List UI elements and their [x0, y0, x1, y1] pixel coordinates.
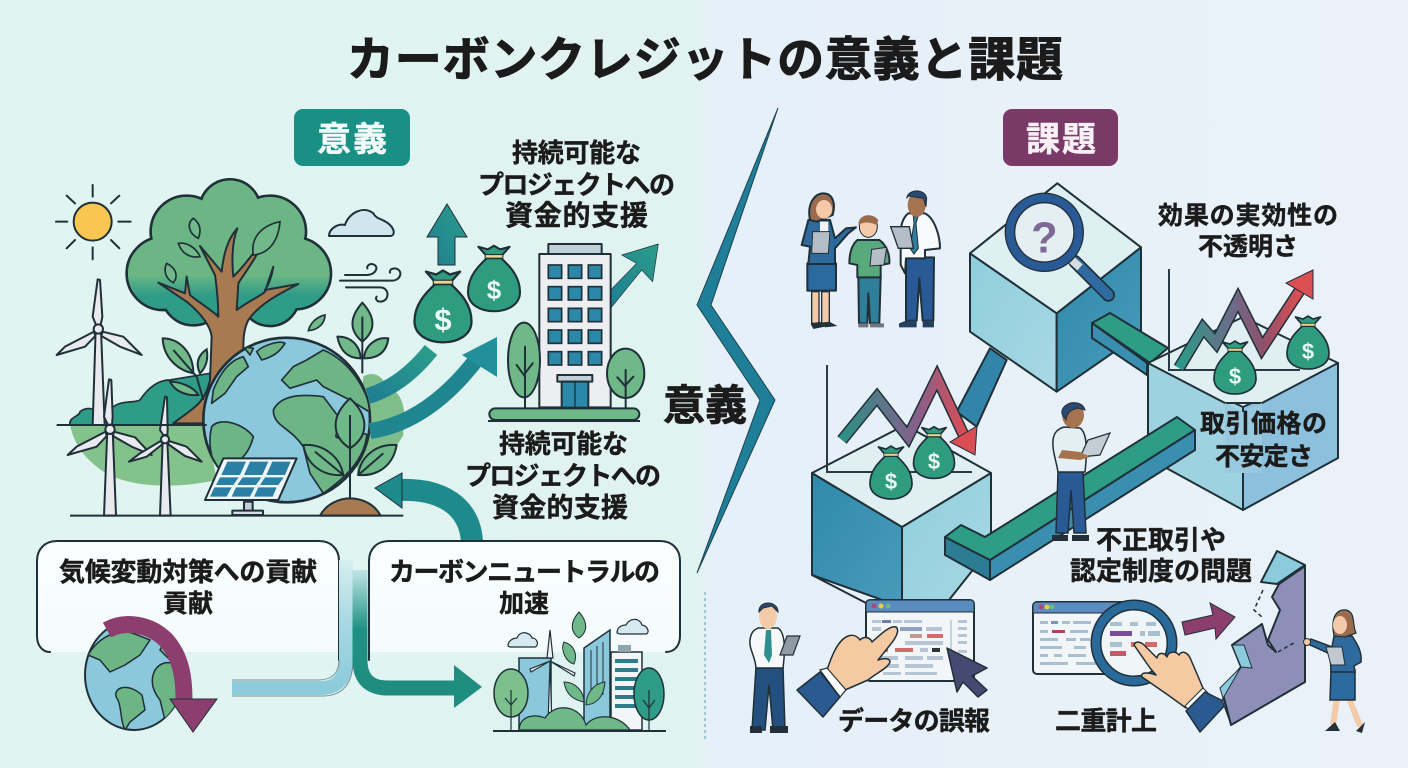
badge: challenges: [1003, 109, 1118, 166]
text: effect opacity: [1158, 202, 1338, 261]
icon: money bag: [414, 271, 472, 342]
icon: mouse cursor: [947, 648, 987, 697]
arrow: light band: [232, 560, 353, 696]
text: effect opacity: 効果の実効性の: [1158, 202, 1338, 230]
icon: cloud: [329, 210, 394, 236]
badge: significance: 意義: [317, 121, 387, 159]
arrow: plum pointing at broken block: [1182, 603, 1235, 639]
icon: magnifying glass with question mark: ?: [1031, 215, 1058, 263]
icon: money bag: [870, 446, 912, 499]
text: data error: データの誤報: [838, 706, 990, 736]
panel: climate contribution box: 貢献: [163, 590, 213, 618]
icon: solar panel: [205, 458, 297, 515]
figure: man: [891, 191, 940, 327]
icon: large wind turbine: [57, 279, 142, 425]
text: sustainable project funding (top): [478, 138, 675, 231]
panel: climate contribution box: [37, 541, 339, 660]
figure: person with clipboard: [750, 603, 800, 733]
beam: upper connector: [1092, 313, 1168, 363]
icon: tree: [127, 179, 331, 423]
panel: carbon neutral box: [369, 541, 680, 660]
text: double counting: 二重計上: [1055, 706, 1157, 736]
text: sustainable project funding (top): プロジェクトへの: [478, 170, 675, 200]
panel: carbon neutral box: カーボンニュートラルの: [389, 557, 660, 587]
text: effect opacity: 不透明さ: [1198, 233, 1298, 261]
figure: woman: [802, 193, 856, 329]
panel: carbon neutral box: 加速: [499, 590, 549, 618]
icon: pointing hand: [1134, 642, 1227, 732]
icon: sapling: [303, 398, 397, 516]
cube: magnifier block: [957, 183, 1141, 427]
icon: broken block: [1220, 551, 1305, 725]
chart: upward price line: [1169, 269, 1313, 370]
icon: magnifying glass: [1096, 605, 1172, 681]
icon: money bag: $: [1302, 339, 1314, 364]
cube: data block: [812, 425, 991, 607]
text: price instability: 取引価格の: [1200, 410, 1327, 438]
icon: globe: [203, 338, 372, 502]
text: fraud and certification: [1070, 525, 1252, 586]
panel: challenges: [750, 109, 1365, 736]
icon: magnifying glass with question mark: [1010, 198, 1108, 295]
arrow: up: [427, 204, 467, 265]
text: price instability: [1200, 410, 1327, 471]
icon: money bag: [914, 427, 954, 478]
base line under building: [488, 420, 640, 422]
illustration: nature scene with tree, turbines and globe: [56, 179, 404, 516]
icon: sun: [56, 185, 131, 259]
icon: ground: [70, 425, 217, 486]
icon: small plant: [337, 303, 388, 373]
window: double counting with magnifier: [1033, 602, 1227, 732]
figure: woman presenting: [1304, 610, 1365, 733]
icon: green city: [493, 612, 666, 731]
icon: money bag: $: [487, 275, 502, 305]
arrow: curved flow toward building: [370, 337, 497, 431]
icon: leaves at trunk: [163, 338, 207, 400]
icon: money bag: $: [928, 449, 940, 474]
text: fraud and certification: 不正取引や: [1096, 525, 1226, 555]
chart: downward price line: [827, 365, 977, 472]
icon: turbines front: [68, 379, 202, 516]
text: sustainable project funding (middle): [465, 429, 661, 523]
text: sustainable project funding (middle): 持続可能な: [499, 429, 628, 459]
figure: person with laptop: [1052, 402, 1110, 541]
icon: money bag: [1214, 341, 1256, 394]
panel: climate contribution box: 気候変動対策への貢献: [59, 557, 317, 587]
group of people: [802, 191, 940, 329]
text: price instability: 不安定さ: [1215, 443, 1313, 471]
beam: checkmark connector: [945, 417, 1195, 580]
text: sustainable project funding (middle): 資金的支援: [492, 493, 628, 523]
text: sustainable project funding (middle): プロジェクトへの: [465, 461, 661, 491]
panel: significance: [37, 109, 680, 732]
figure: child: [849, 215, 889, 327]
text: fraud and certification: 認定制度の問題: [1070, 556, 1252, 586]
icon: money bag: [1287, 316, 1329, 369]
cube: price instability block: [1148, 317, 1338, 510]
icon: office building: [489, 244, 658, 420]
arrow: curved flow from globe upward: [368, 350, 431, 396]
ground line: [57, 425, 403, 516]
icon: money bag: $: [885, 469, 897, 494]
divider: lightning shape: [697, 108, 778, 573]
text: sustainable project funding (top): 持続可能な: [512, 138, 641, 168]
badge: significance: [294, 109, 410, 166]
icon: pointing hand: [797, 627, 898, 717]
decorative centre label: 意義: [663, 382, 747, 429]
arrow: curved back to sapling: [375, 473, 472, 542]
window: data screen with pointing hand: [797, 600, 987, 717]
title: カーボンクレジットの意義と課題: [347, 33, 1063, 86]
badge: challenges: 課題: [1026, 121, 1096, 159]
text: sustainable project funding (top): 資金的支援: [505, 200, 648, 231]
icon: small globe with downward arrow: [85, 620, 217, 732]
arrow: teal band: [360, 570, 482, 708]
icon: money bag: $: [1229, 364, 1241, 389]
icon: wind: [340, 264, 400, 302]
icon: money bag: [468, 246, 520, 311]
icon: bushes: [70, 373, 404, 477]
icon: money bag: $: [434, 302, 452, 337]
